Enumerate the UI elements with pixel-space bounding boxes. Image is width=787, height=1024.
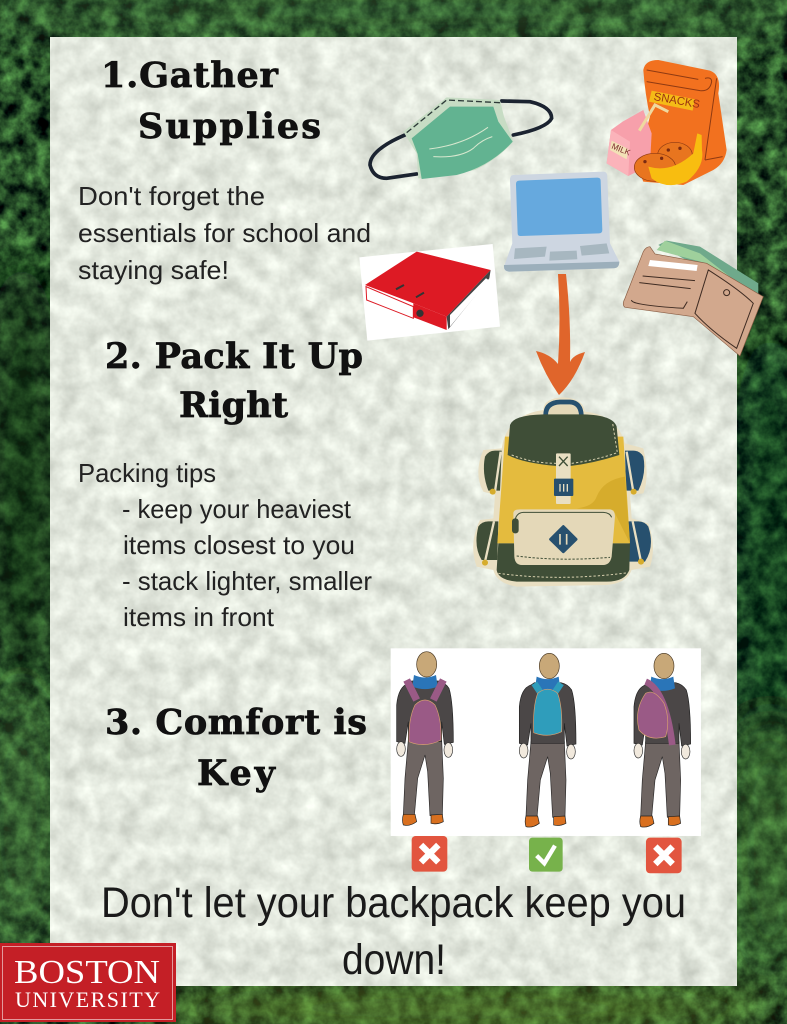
Boston University logo — [0, 943, 176, 1022]
text: packing tips: items closest to you — [123, 530, 355, 560]
text: packing tips: Packing tips — [78, 458, 216, 488]
Boston University logo: BOSTON — [14, 954, 160, 991]
icon: face mask — [370, 97, 552, 179]
heading: 3. Comfort is Key: 3. Comfort is — [105, 702, 367, 743]
icon: wrong x — [646, 838, 682, 873]
cookies and banana — [634, 133, 702, 185]
figure: backpack wearing comparison — [391, 648, 701, 836]
text: essentials: staying safe! — [78, 255, 229, 285]
text: packing tips: - keep your heaviest — [122, 494, 352, 524]
milk carton: MILK — [610, 141, 632, 158]
text: packing tips — [78, 458, 372, 632]
person: purple backpack on one shoulder — [634, 653, 691, 827]
icon: laptop — [504, 172, 619, 272]
icon: wallet — [623, 241, 763, 356]
heading: 1. Gather Supplies: 1.Gather — [101, 55, 279, 96]
snacks label: SNACKS — [653, 91, 701, 111]
heading: 2. Pack It Up Right — [105, 336, 363, 426]
text: essentials: Don't forget the — [78, 181, 265, 211]
icon: red binder — [359, 244, 500, 341]
person: blue backpack correct — [519, 653, 576, 827]
closing message: Don't let your backpack keep you — [101, 879, 686, 927]
heading: 2. Pack It Up Right: Right — [179, 385, 288, 426]
text: essentials — [78, 181, 371, 285]
heading: 3. Comfort is Key — [105, 702, 367, 794]
heading: 2. Pack It Up Right: 2. Pack It Up — [105, 336, 363, 377]
icon: backpack — [473, 397, 653, 587]
text: essentials: essentials for school and — [78, 218, 371, 248]
text: packing tips: - stack lighter, smaller — [122, 566, 372, 596]
heading: 1. Gather Supplies — [101, 55, 321, 147]
person: purple backpack too low — [397, 652, 453, 825]
arrow: supplies into backpack — [536, 274, 585, 395]
heading: 1. Gather Supplies: Supplies — [138, 106, 321, 147]
Boston University logo: UNIVERSITY — [15, 987, 160, 1012]
icon: correct check — [529, 838, 563, 872]
closing message — [101, 879, 686, 984]
icon: snack bag — [607, 60, 727, 185]
text: packing tips: items in front — [123, 602, 275, 632]
heading: 3. Comfort is Key: Key — [197, 753, 277, 794]
closing message: down! — [342, 936, 446, 984]
icon: wrong x — [412, 836, 447, 872]
